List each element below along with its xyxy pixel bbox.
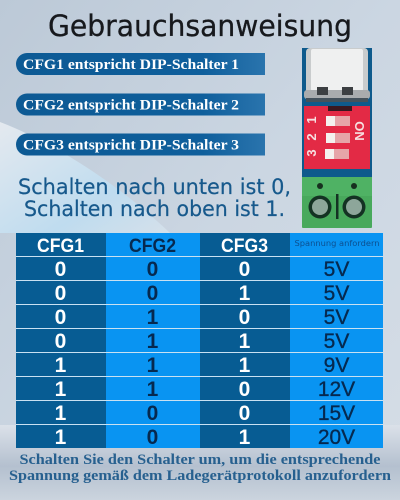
table values: 0 (239, 402, 250, 425)
footer note: Spannung gemäß dem Ladegerätprotokoll anzufordern (9, 468, 392, 484)
table columns (16, 233, 383, 448)
table values: 1 (239, 426, 251, 449)
label: CFG3 (16, 134, 265, 156)
table values: 5V (324, 330, 349, 353)
table values (55, 258, 355, 449)
title: Gebrauchsanweisung (48, 9, 352, 43)
table header: CFG1 (37, 236, 84, 257)
table values: 0 (55, 306, 66, 329)
table values: 1 (239, 282, 251, 305)
red DIP switch: ON (352, 121, 367, 141)
table values: 1 (147, 306, 159, 329)
table values: 1 (239, 330, 251, 353)
table values: 0 (147, 426, 158, 449)
table values: 5V (324, 282, 349, 305)
red DIP switch: 1 (304, 116, 319, 124)
label: CFG2 (16, 94, 265, 116)
red DIP switch: 2 (304, 133, 319, 141)
table values: 12V (318, 378, 355, 401)
table values: 1 (147, 330, 159, 353)
circuit board (302, 48, 372, 226)
label: CFG1: CFG1 entspricht DIP-Schalter 1 (23, 57, 239, 73)
label: CFG3: CFG3 entspricht DIP-Schalter 3 (23, 138, 239, 154)
table values: 5V (324, 306, 349, 329)
table values: 0 (55, 282, 66, 305)
table values: 0 (55, 330, 66, 353)
table values: 1 (147, 378, 159, 401)
switch instructions (18, 175, 291, 221)
table values: 15V (318, 402, 355, 425)
table header: CFG2 (129, 236, 176, 257)
table values: 0 (147, 282, 158, 305)
table header: Spannung anfordern (294, 239, 380, 248)
table values: 1 (55, 426, 67, 449)
red DIP switch: 3 (304, 149, 319, 157)
table values: 0 (147, 258, 158, 281)
green terminal block (302, 177, 372, 228)
voltage table (16, 233, 383, 449)
label: CFG1 (16, 53, 265, 75)
switch instructions: Schalten nach unten ist 0, (18, 175, 291, 199)
table header (37, 236, 380, 257)
switch instructions: Schalten nach oben ist 1. (24, 197, 285, 221)
table values: 1 (239, 354, 251, 377)
table values: 9V (324, 354, 349, 377)
table values: 1 (147, 354, 159, 377)
footer note: Schalten Sie den Schalter um, um die entsprechende (20, 452, 381, 468)
photo: USB-C DIP switch board (302, 48, 372, 228)
red DIP switch (304, 106, 370, 169)
table values: 1 (55, 402, 67, 425)
table values: 20V (318, 426, 355, 449)
table values: 0 (55, 258, 66, 281)
USB-C connector (304, 48, 370, 102)
table values: 0 (147, 402, 158, 425)
label: CFG2: CFG2 entspricht DIP-Schalter 2 (23, 98, 239, 114)
table values: 0 (239, 378, 250, 401)
table values: 5V (324, 258, 349, 281)
footer note (9, 452, 392, 484)
table values: 0 (239, 306, 250, 329)
table values: 0 (239, 258, 250, 281)
table header: CFG3 (221, 236, 268, 257)
table values: 1 (55, 354, 67, 377)
table values: 1 (55, 378, 67, 401)
